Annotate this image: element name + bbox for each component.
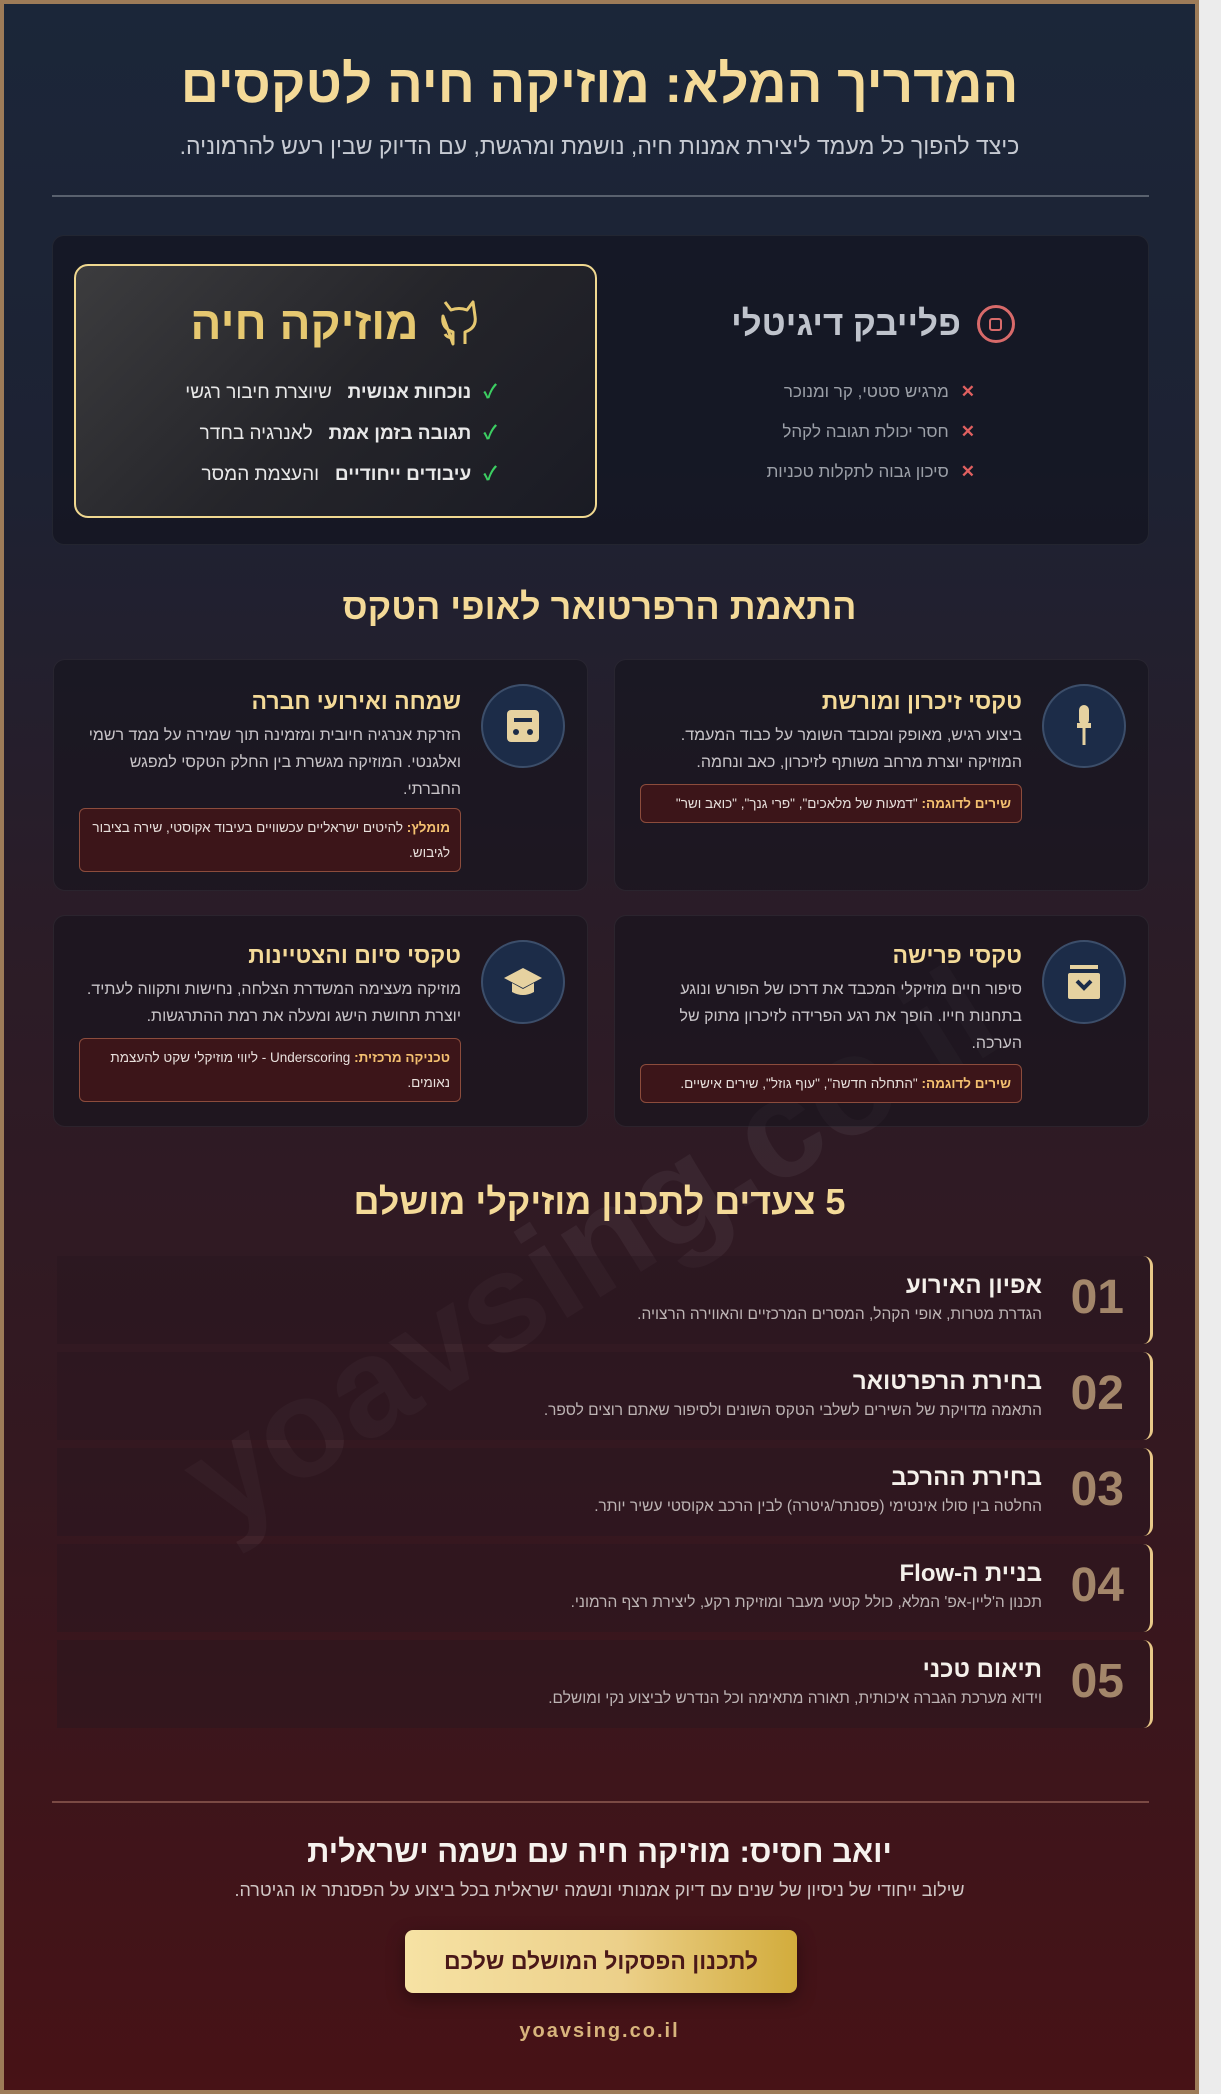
text: ביצוע רגיש, מאופק ומכובד השומר על כבוד המעמד. המוזיקה יוצרת מרחב משותף לזיכרון, כאב ונחמה. — [681, 727, 1022, 771]
title: שמחה ואירועי חברה — [251, 688, 461, 714]
heading: live music: מוזיקה חיה — [190, 297, 419, 349]
step 02: 02 — [1071, 1367, 1124, 1420]
step 01: הגדרת מטרות, אופי הקהל, המסרים המרכזיים והאווירה הרצויה. — [637, 1306, 1042, 1323]
step 02: בחירת הרפרטואר — [853, 1368, 1042, 1395]
step 01 — [57, 1256, 1153, 1344]
step 03: החלטה בין סולו אינטימי (פסנתר/גיטרה) לבין הרכב אקוסטי עשיר יותר. — [594, 1498, 1042, 1515]
list: benefits: ✓תגובה בזמן אמת לאנרגיה בחדר — [200, 423, 497, 444]
card: memorial — [614, 659, 1149, 891]
icon: cat — [441, 300, 477, 346]
step 01: 01 — [1071, 1271, 1124, 1324]
heading: repertoire: התאמת הרפרטואר לאופי הטקס — [343, 586, 856, 627]
callout: טכניקה מרכזית: Underscoring - ליווי מוזיקלי שקט להעצמת נאומים. — [110, 1050, 450, 1090]
text: סיפור חיים מוזיקלי המכבד את דרכו של הפורש ונוגע בתחנות חייו. הופך את רגע הפרידה לזיכרון מתוק של הערכה. — [680, 981, 1022, 1052]
icon: box — [481, 684, 565, 768]
step 05: 05 — [1071, 1655, 1124, 1708]
card: retirement — [614, 915, 1149, 1127]
callout — [640, 784, 1022, 823]
icon: red circle — [977, 305, 1015, 343]
step 05: תיאום טכני — [923, 1656, 1042, 1683]
card: celebration — [53, 659, 588, 891]
step 01: אפיון האירוע — [906, 1272, 1042, 1299]
callout: מומלץ: להיטים ישראליים עכשוויים בעיבוד אקוסטי, שירה בציבור לגיבוש. — [92, 820, 450, 860]
button — [405, 1930, 797, 1993]
step 04: תכנון ה'ליין-אפ' המלא, כולל קטעי מעבר ומוזיקת רקע, ליצירת רצף הרמוני. — [571, 1594, 1042, 1611]
list: drawbacks: ✕מרגיש סטטי, קר ומנוכר — [784, 382, 975, 401]
icon: archive — [1042, 940, 1126, 1024]
list: benefits — [185, 382, 497, 485]
callout — [79, 1038, 461, 1102]
steps list — [57, 1256, 1153, 1728]
icon: graduation cap — [481, 940, 565, 1024]
text: מוזיקה מעצימה המשדרת הצלחה, נחישות ותקווה לעתיד. יוצרת תחושת הישג ומעלה את רמת ההתרגשות. — [87, 981, 461, 1025]
url: yoavsing.co.il — [519, 2020, 680, 2042]
title: טקסי סיום והצטיינות — [248, 942, 461, 968]
callout: שירים לדוגמה: "התחלה חדשה", "עוף גוזל", שירים אישיים. — [680, 1076, 1011, 1091]
icon: microphone — [1042, 684, 1126, 768]
step 05: וידוא מערכת הגברה איכותית, תאורה מתאימה וכל הנדרש לביצוע נקי ומושלם. — [548, 1690, 1042, 1707]
panel: playback — [731, 304, 1015, 481]
step 04: בניית ה-Flow — [900, 1560, 1042, 1587]
list: drawbacks: ✕חסר יכולת תגובה לקהל — [782, 422, 975, 441]
list: benefits: ✓נוכחות אנושית שיוצרת חיבור רגשי — [185, 382, 497, 403]
heading: playback: פלייבק דיגיטלי — [731, 304, 961, 343]
watermark: yoavsing.co.il — [155, 935, 1023, 1559]
panel: live music — [74, 264, 597, 518]
callout — [640, 1064, 1022, 1103]
panel: comparison — [52, 235, 1149, 545]
title: טקסי פרישה — [892, 942, 1022, 968]
button: לתכנון הפסקול המושלם שלכם — [444, 1948, 758, 1974]
list: drawbacks: ✕סיכון גבוה לתקלות טכניות — [767, 462, 975, 481]
step 02: התאמה מדויקת של השירים לשלבי הטקס השונים ולסיפור שאתם רוצים לספר. — [544, 1402, 1042, 1419]
step 04: 04 — [1071, 1559, 1124, 1612]
text: הזרקת אנרגיה חיובית ומזמינה תוך שמירה על ממד רשמי ואלגנטי. המוזיקה מגשרת בין החלק הטקסי למפגש החברתי. — [89, 727, 461, 798]
list: drawbacks — [767, 382, 975, 481]
subtitle: כיצד להפוך כל מעמד ליצירת אמנות חיה, נושמת ומרגשת, עם הדיוק שבין רעש להרמוניה. — [180, 133, 1019, 159]
callout — [79, 808, 461, 872]
step 05 — [57, 1640, 1153, 1728]
footer title: יואב חסיס: מוזיקה חיה עם נשמה ישראלית — [307, 1834, 892, 1869]
footer text: שילוב ייחודי של ניסיון של שנים עם דיוק אמנותי ונשמה ישראלית בכל ביצוע על הפסנתר או הגיטרה. — [234, 1880, 965, 1900]
card: graduation — [53, 915, 588, 1127]
step 04 — [57, 1544, 1153, 1632]
step 03: 03 — [1071, 1463, 1124, 1516]
title: המדריך המלא: מוזיקה חיה לטקסים — [181, 55, 1018, 114]
step 03: בחירת ההרכב — [891, 1464, 1042, 1491]
list: benefits: ✓עיבודים ייחודיים והעצמת המסר — [202, 464, 497, 485]
step 03 — [57, 1448, 1153, 1536]
heading: steps: 5 צעדים לתכנון מוזיקלי מושלם — [354, 1181, 845, 1222]
step 02 — [57, 1352, 1153, 1440]
callout: שירים לדוגמה: "דמעות של מלאכים", "פרי גנך", "כואב ושר" — [676, 796, 1011, 811]
title: טקסי זיכרון ומורשת — [822, 688, 1022, 714]
